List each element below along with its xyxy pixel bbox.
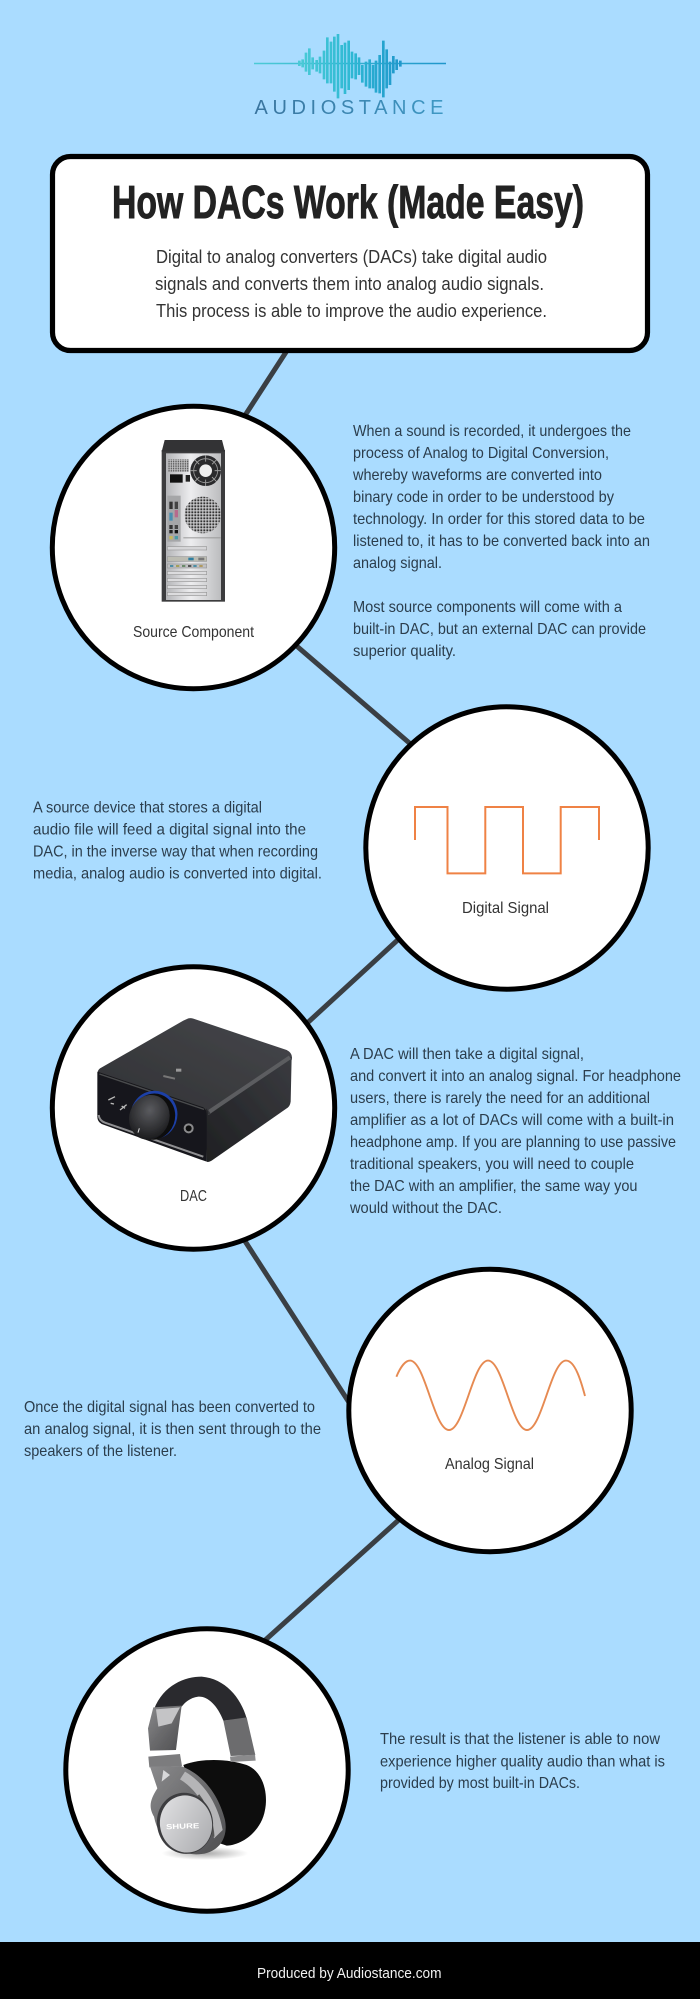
icon: DAC device: [97, 1018, 292, 1162]
text block: source component: binary code in order to be understood by: [353, 489, 614, 506]
text block: source component: whereby waveforms are converted into: [352, 467, 602, 484]
circle frame: [66, 1629, 348, 1911]
icon: headphones: [148, 1677, 266, 1860]
text block: source component: When a sound is recorded, it undergoes the: [353, 423, 631, 440]
circle frame: [52, 967, 335, 1249]
connector: DAC to analog signal: [243, 1238, 352, 1407]
text block: digital signal: [33, 800, 322, 882]
text block: source component: [352, 423, 650, 660]
intro text: signals and converts them into analog audio signals.: [155, 274, 544, 294]
text block: source component: listened to, it has to be converted back into an: [353, 533, 650, 550]
text block: DAC: users, there is rarely the need for an additional: [350, 1090, 650, 1107]
text block: source component: process of Analog to Digital Conversion,: [353, 445, 609, 462]
text block: result: [380, 1731, 665, 1792]
connector: source component to digital signal: [292, 642, 414, 747]
intro text: Digital to analog converters (DACs) take digital audio: [156, 247, 547, 267]
text block: DAC: A DAC will then take a digital signal,: [350, 1046, 584, 1063]
label: DAC: [180, 1188, 207, 1205]
text block: digital signal: A source device that stores a digital: [33, 800, 262, 816]
text block: analog signal: an analog signal, it is then sent through to the: [24, 1421, 321, 1438]
text block: source component: analog signal.: [353, 555, 442, 572]
footer text: Produced by Audiostance.com: [257, 1965, 442, 1982]
footer bar: [0, 1942, 700, 1999]
text block: analog signal: Once the digital signal has been converted to: [24, 1399, 315, 1416]
text block: digital signal: audio file will feed a digital signal into the: [33, 822, 306, 838]
panel: digital signal: [366, 707, 648, 989]
logo: Audiostance: [254, 34, 446, 119]
logo wordmark: AUDIOSTANCE: [254, 97, 444, 119]
icon: PC tower: [162, 440, 225, 602]
chart: square wave: [415, 807, 599, 873]
text block: DAC: would without the DAC.: [349, 1200, 502, 1217]
text block: digital signal: media, analog audio is converted into digital.: [33, 866, 322, 882]
connector: digital signal to DAC: [304, 936, 402, 1026]
text block: source component: superior quality.: [353, 643, 456, 660]
intro text: [155, 247, 547, 321]
text block: source component: technology. In order for this stored data to be: [353, 511, 645, 528]
intro text: This process is able to improve the audio experience.: [156, 301, 547, 321]
circle frame: [366, 707, 648, 989]
chart: sine wave: [396, 1361, 585, 1430]
text block: source component: Most source components will come with a: [353, 599, 622, 616]
connector: title to source component: [244, 349, 288, 417]
brand mark: SHURE: [166, 1821, 200, 1831]
panel: source component: [52, 406, 335, 689]
label: Digital Signal: [462, 900, 549, 917]
text block: source component: built-in DAC, but an external DAC can provide: [353, 621, 646, 638]
circle frame: [349, 1269, 631, 1552]
panel: title box: [52, 156, 648, 350]
panel: headphones: [66, 1629, 348, 1911]
text block: DAC: the DAC with an amplifier, the same way you: [350, 1178, 638, 1195]
icon: sound waveform: [254, 34, 446, 98]
text block: result: The result is that the listener is able to now: [380, 1731, 660, 1748]
text block: analog signal: speakers of the listener.: [24, 1443, 177, 1460]
panel: DAC: [52, 967, 335, 1249]
text block: result: provided by most built-in DACs.: [380, 1775, 580, 1792]
label: Source Component: [133, 624, 254, 641]
panel: analog signal: [349, 1269, 631, 1552]
label: Analog Signal: [445, 1456, 534, 1473]
text block: analog signal: [24, 1399, 321, 1460]
text block: DAC: [349, 1046, 681, 1217]
circle frame: [52, 406, 335, 689]
text block: result: experience higher quality audio than what is: [380, 1754, 665, 1770]
text block: DAC: traditional speakers, you will need to couple: [350, 1156, 634, 1173]
connector: analog signal to headphones: [262, 1517, 402, 1643]
title box frame: [52, 156, 648, 350]
text block: DAC: amplifier as a lot of DACs will come with a built-in: [350, 1112, 674, 1129]
footer: [0, 1942, 700, 1999]
text block: digital signal: DAC, in the inverse way that when recording: [33, 844, 318, 860]
